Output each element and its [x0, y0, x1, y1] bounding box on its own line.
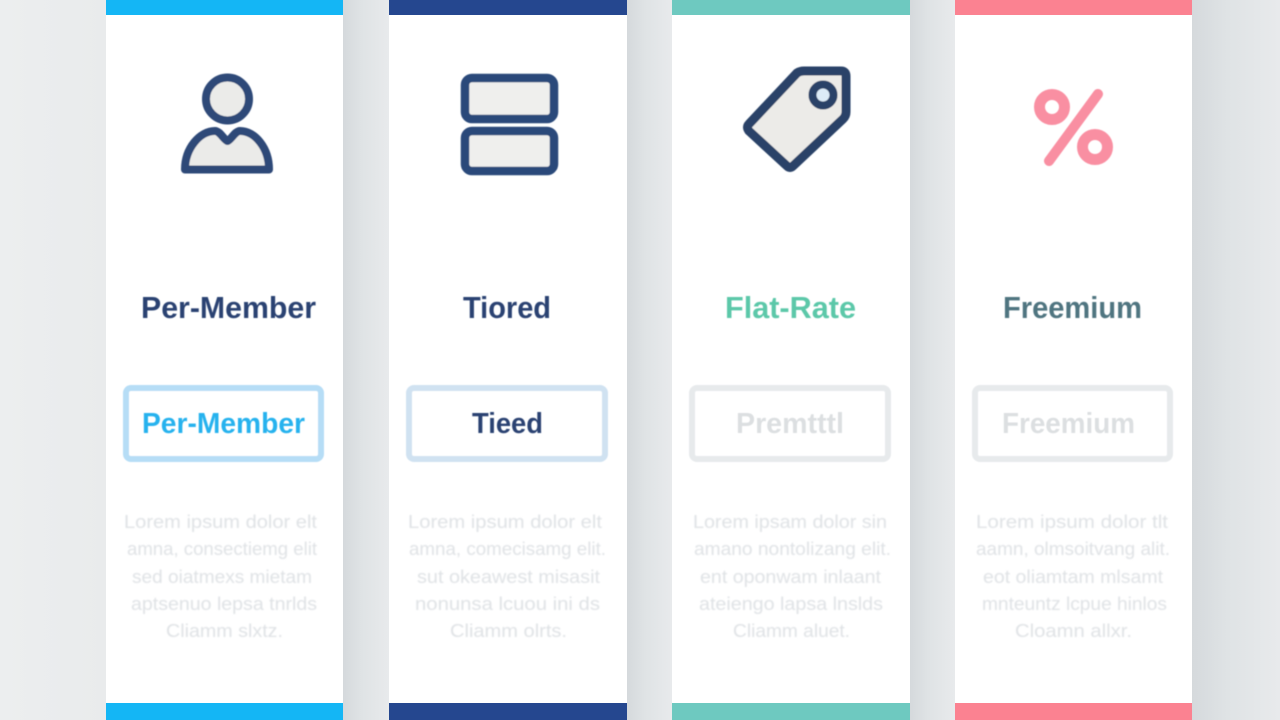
heading: Tiored: Tiored [463, 290, 551, 325]
text block: description [976, 511, 1170, 641]
panel: Per-Member [106, 0, 343, 720]
text block: description [408, 511, 606, 641]
heading: Per-Member: Per-Member [141, 290, 316, 325]
text block: description: ateiengo lapsa lnslds [699, 593, 883, 614]
text block: description: ent oponwam inlaant [700, 566, 881, 587]
icon: percent [1040, 94, 1108, 161]
badge: Per-Member: Per-Member [142, 408, 305, 440]
panel: Freemium [955, 0, 1192, 720]
badge: Premtttl [692, 388, 888, 459]
text block: description: Lorem ipsam dolor sin [693, 511, 887, 532]
text block: description: sut okeawest misasit [417, 566, 600, 587]
text block: description: Cliamm slxtz. [166, 620, 283, 641]
badge: Freemium [975, 388, 1170, 459]
heading: Flat-Rate: Flat-Rate [725, 290, 856, 325]
badge: Tieed [409, 388, 605, 459]
badge: Premtttl: Premtttl [736, 408, 844, 440]
text block: description: Cliamm aluet. [733, 620, 850, 641]
icon: person [185, 78, 269, 170]
text block: description: eot oliamtam mlsamt [983, 566, 1163, 587]
badge: Freemium: Freemium [1002, 408, 1135, 440]
text block: description: Lorem ipsum dolor elt [408, 511, 602, 532]
text block: description: Lorem ipsum dolor elt [124, 511, 317, 532]
icon: stacked rectangles [465, 78, 554, 171]
heading: Freemium: Freemium [1003, 290, 1142, 325]
panel: Flat-Rate [672, 0, 910, 720]
text block: description [693, 511, 891, 641]
text block: description [124, 511, 317, 641]
panel: Tiered [389, 0, 627, 720]
text block: description: aamn, olmsoitvang alit. [976, 538, 1170, 559]
text block: description: amano nontolizang elit. [694, 538, 891, 559]
icon: price tag [748, 71, 846, 168]
text block: description: Cliamm olrts. [450, 620, 567, 641]
text block: description: nonunsa lcuou ini ds [415, 593, 600, 614]
text block: description: Cloamn allxr. [1015, 620, 1132, 641]
badge: Per-Member [126, 388, 321, 459]
text block: description: mnteuntz lcpue hinlos [982, 593, 1167, 614]
text block: description: Lorem ipsum dolor tlt [976, 511, 1168, 532]
badge: Tieed: Tieed [472, 408, 543, 440]
text block: description: sed oiatmexs mietam [132, 566, 312, 587]
text block: description: amna, consectiemg elit [127, 538, 317, 559]
text block: description: aptsenuo lepsa tnrlds [131, 593, 317, 614]
text block: description: amna, comecisamg elit. [409, 538, 606, 559]
